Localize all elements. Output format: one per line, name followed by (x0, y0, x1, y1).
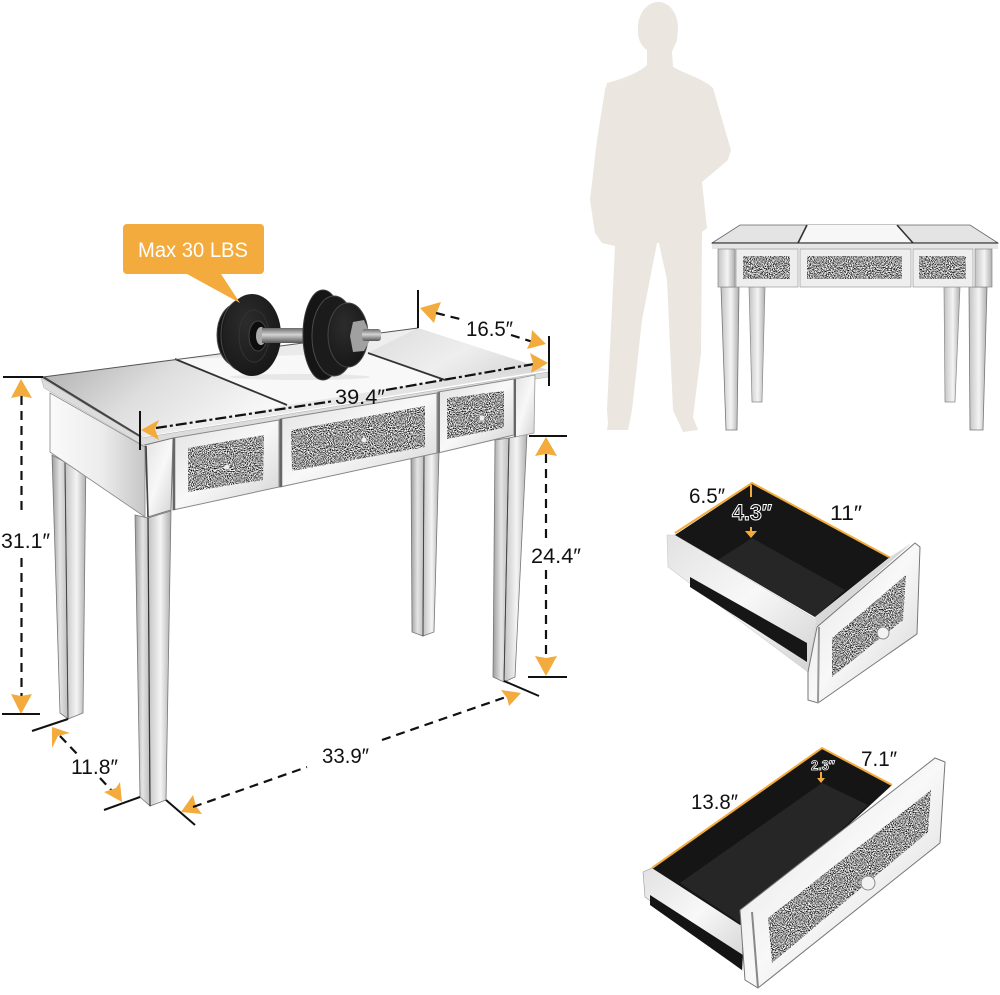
long drawer interior (652, 748, 892, 925)
label 11: 11″ (830, 501, 862, 525)
bar (262, 328, 306, 343)
drawer inner edge (815, 543, 912, 627)
drawer body side (667, 535, 817, 672)
label 2.3 depth: 2.3″ (811, 757, 835, 773)
orange measure lines (675, 483, 889, 557)
person silhouette (590, 2, 731, 432)
main console table (41, 328, 548, 806)
front right leg (493, 434, 527, 682)
dimension: depth 16.5: 16.5″ (466, 317, 513, 341)
left drawer front (173, 420, 279, 510)
open long drawer (643, 747, 945, 988)
dimension: width 39.4 (140, 353, 548, 450)
small table apron (718, 249, 992, 287)
table top (41, 328, 548, 445)
front corner post (145, 438, 173, 517)
label 2.3 depth (811, 757, 835, 783)
back left leg (52, 455, 86, 719)
label 13.8: 13.8″ (691, 790, 738, 814)
left side apron (50, 393, 145, 517)
callout: max load: Max 30 LBS (138, 238, 248, 262)
dimension: leg spacing 11.8: 11.8″ (71, 755, 118, 779)
dumbbell shadow (230, 374, 370, 380)
dimension: height 31.1 (1, 377, 50, 714)
long drawer orange lines (652, 748, 892, 868)
long drawer body side (643, 868, 743, 970)
dimension: leg height 24.4 (528, 436, 581, 677)
label 6.5: 6.5″ (689, 484, 725, 508)
right drawer front (438, 379, 515, 453)
dimension: leg height 24.4: 24.4″ (531, 544, 581, 568)
drawer interior (675, 484, 890, 617)
small table top (712, 225, 998, 249)
small front-view table (712, 225, 998, 430)
dimension: leg spacing 33.9: 33.9″ (322, 744, 369, 768)
drawer slide rail (690, 577, 807, 662)
open small drawer (667, 483, 920, 703)
callout: max load (123, 224, 264, 303)
label 4.3 depth (732, 485, 772, 538)
dimension: depth 16.5 (418, 290, 549, 386)
back right leg (411, 452, 439, 636)
right plates (303, 290, 381, 380)
right corner post (515, 375, 535, 437)
dimension: width 39.4: 39.4″ (335, 385, 385, 409)
centre drawer front (280, 393, 437, 487)
left plates (217, 294, 281, 376)
label 7.1: 7.1″ (861, 747, 897, 771)
small table legs (721, 287, 987, 430)
long drawer slide rail (650, 895, 743, 970)
long drawer front panel (740, 758, 945, 988)
dimension: height 31.1: 31.1″ (1, 529, 50, 553)
dimension: leg spacing 11.8 (32, 719, 140, 810)
dumbbell (217, 290, 381, 380)
front left leg (135, 511, 171, 806)
label 4.3 depth: 4.3″ (732, 500, 772, 525)
dimension: leg spacing 33.9 (166, 681, 539, 825)
drawer front panel (808, 543, 920, 703)
